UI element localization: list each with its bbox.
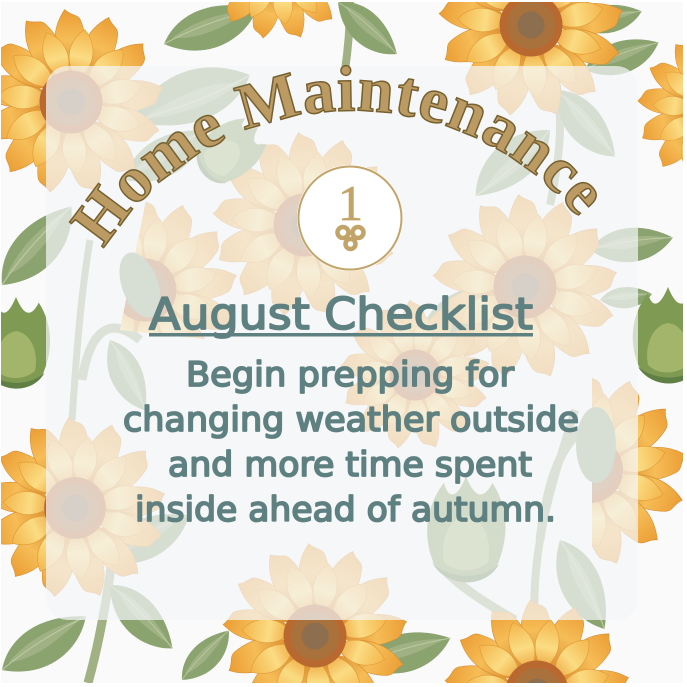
panel: translucent overlay xyxy=(46,66,638,620)
buds xyxy=(0,107,687,582)
stems xyxy=(72,2,600,683)
text block: description xyxy=(123,355,579,530)
key bow xyxy=(338,227,364,249)
icon: key logo badge xyxy=(297,165,403,271)
title: Home Maintenance arc: Home Maintenance xyxy=(68,64,597,249)
text block: description: inside ahead of autumn. xyxy=(135,490,556,530)
text block: description: Begin prepping for xyxy=(186,355,514,395)
sunflower blooms at page edges xyxy=(222,44,683,683)
text block: description: changing weather outside xyxy=(123,400,579,440)
sepals on side-view blooms xyxy=(111,247,616,483)
text block: description: and more time spent xyxy=(168,445,532,485)
heading: August Checklist: August Checklist xyxy=(149,289,533,340)
key numeral: 1 xyxy=(338,175,363,231)
